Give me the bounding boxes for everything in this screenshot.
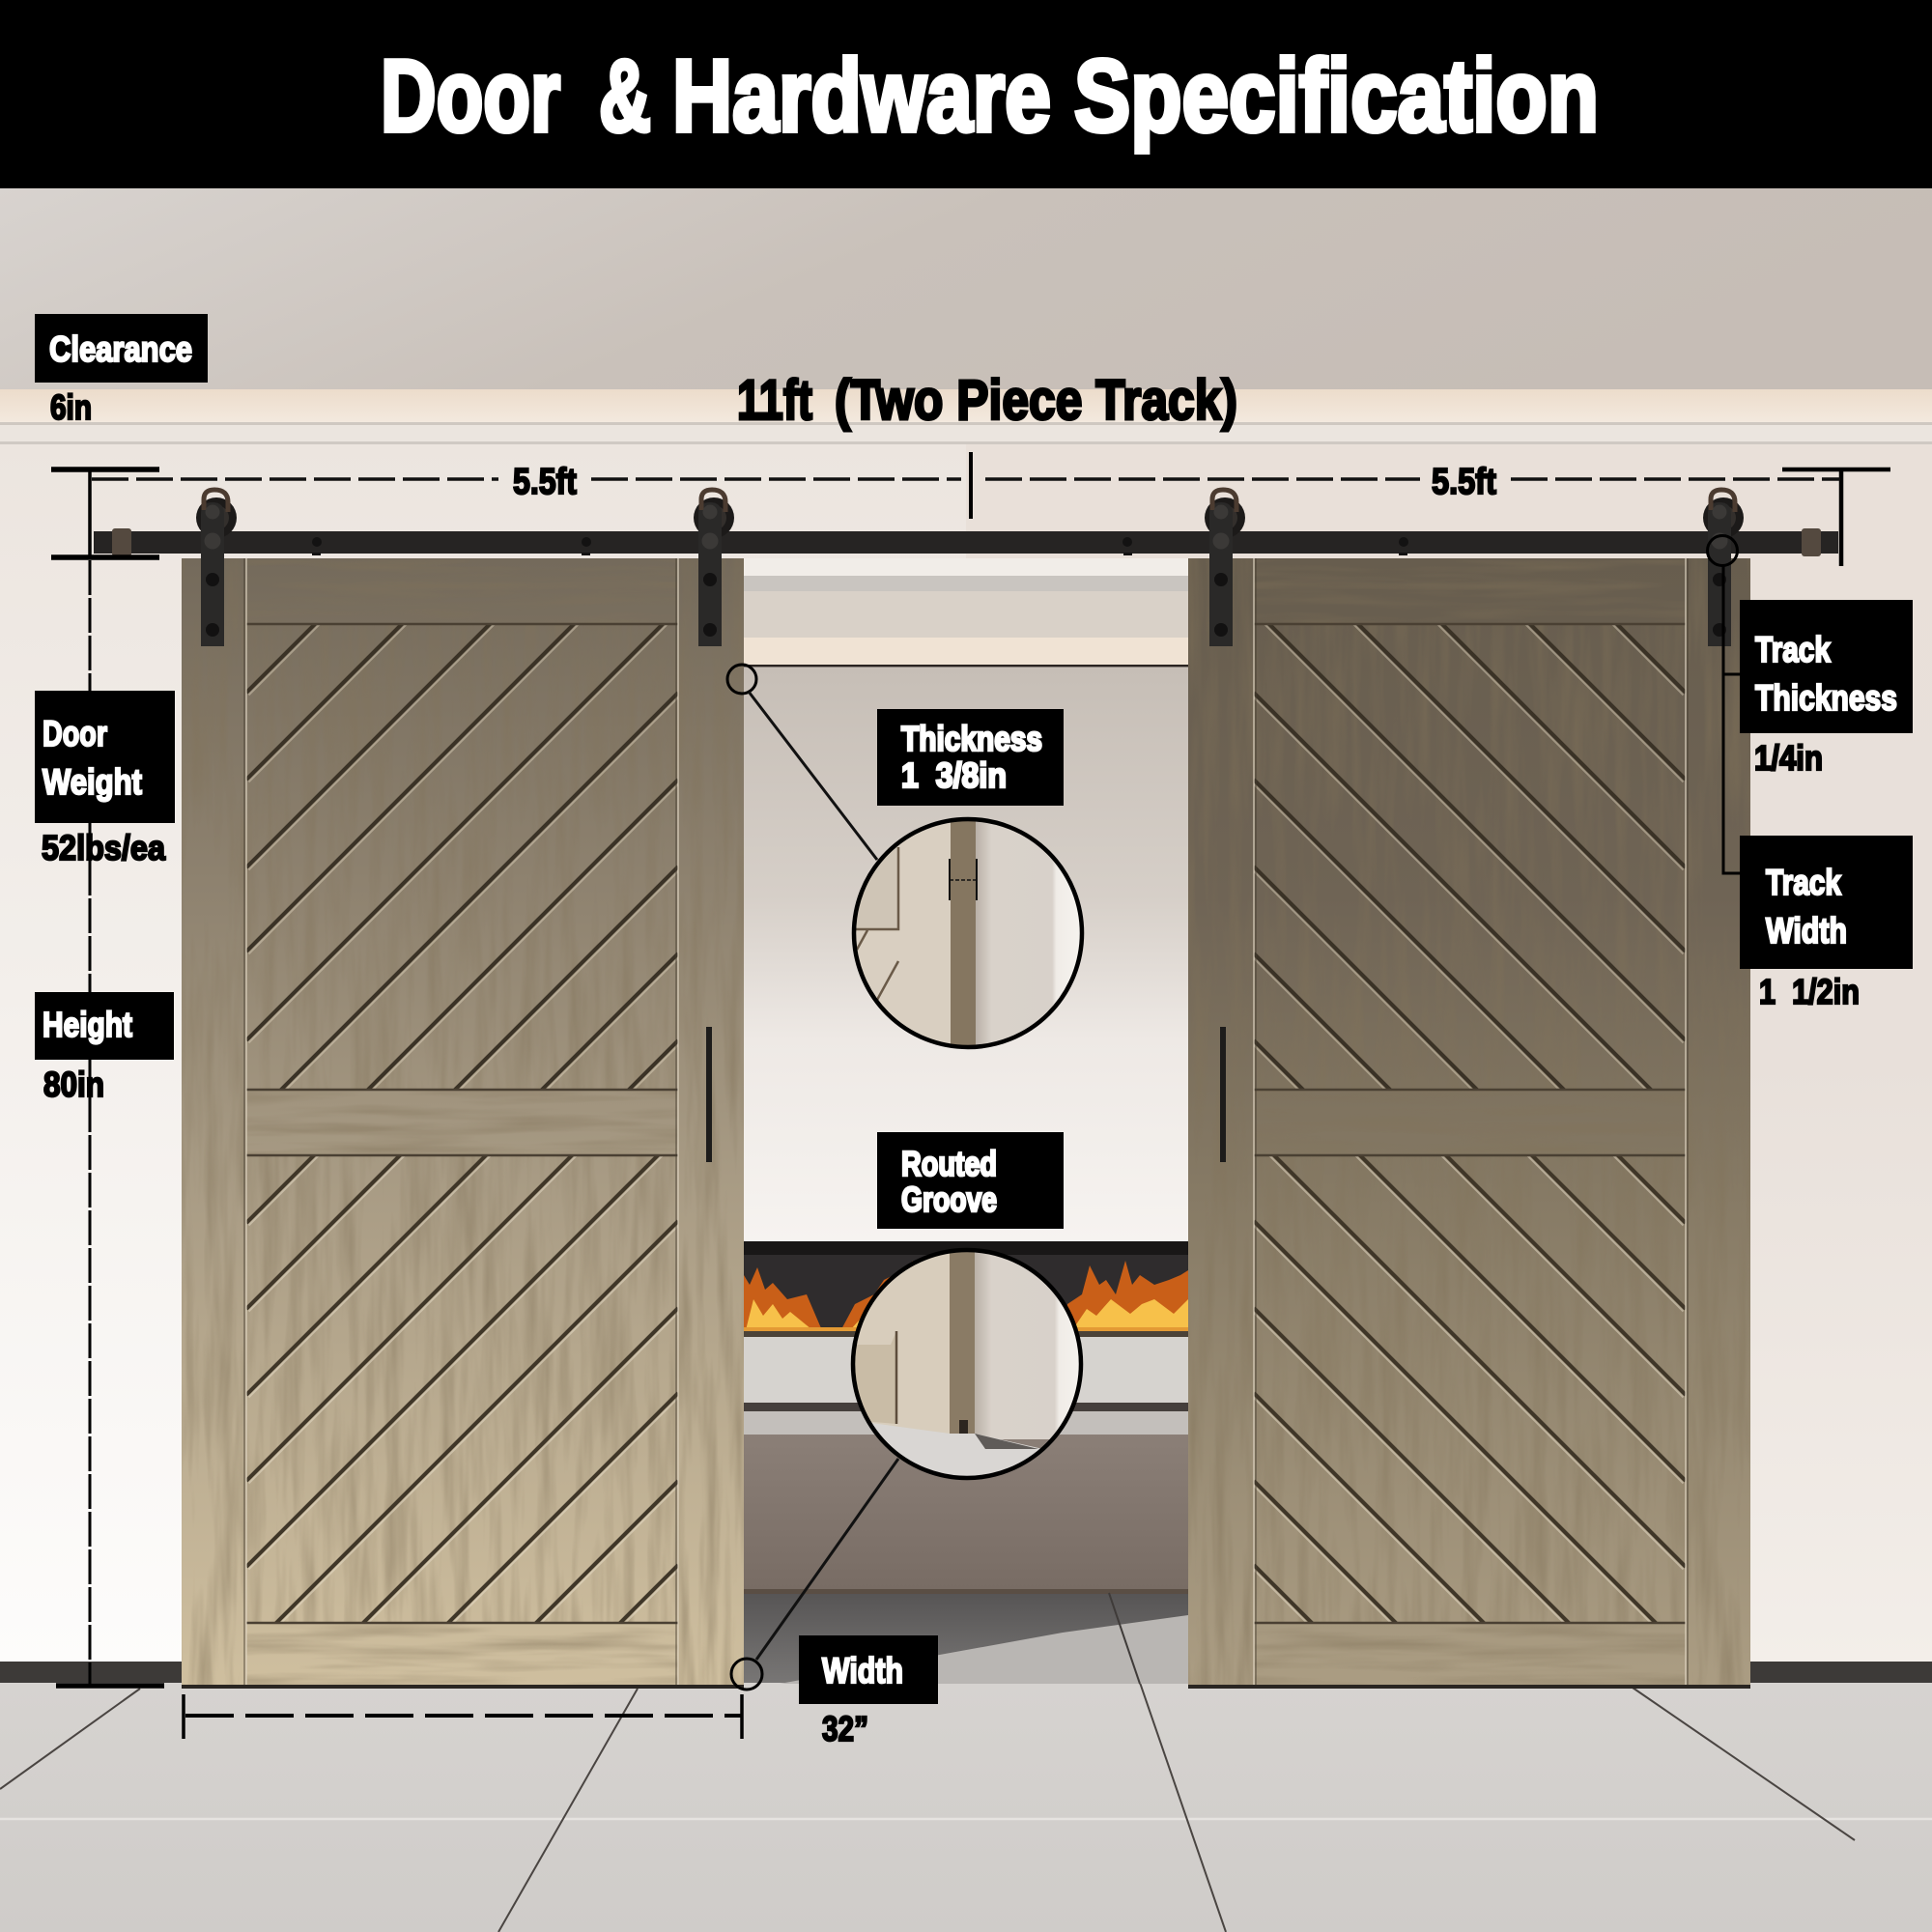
height dimension line bbox=[56, 469, 164, 1686]
rug bbox=[744, 1435, 1188, 1591]
width label: Width bbox=[822, 1651, 903, 1690]
magnified door bottom bbox=[850, 1246, 1086, 1483]
left wall bbox=[0, 444, 966, 1663]
track and hangers bbox=[94, 490, 1838, 646]
routed groove label bbox=[877, 1132, 1064, 1229]
track thickness label: Track bbox=[1755, 630, 1831, 669]
track stoppers bbox=[112, 528, 131, 556]
source marker bbox=[727, 665, 756, 694]
track width label: Width bbox=[1766, 911, 1847, 951]
baseboard bbox=[0, 1662, 1932, 1684]
hanger 1 bbox=[196, 490, 237, 646]
dashed spans bbox=[92, 477, 1840, 481]
track length heading: 11ft bbox=[737, 369, 812, 432]
opening between doors bbox=[744, 558, 1188, 1684]
thickness magnifier bbox=[727, 665, 1082, 1048]
header bar bbox=[0, 0, 1932, 188]
thickness label bbox=[877, 709, 1064, 806]
door weight label: Door bbox=[43, 714, 107, 753]
source marker bbox=[731, 1659, 762, 1690]
routed groove label: Groove bbox=[901, 1179, 997, 1219]
right barn door bbox=[1188, 261, 1750, 1932]
thickness label: Thickness bbox=[901, 719, 1042, 758]
fireplace band bbox=[744, 1241, 1188, 1330]
width label bbox=[799, 1635, 938, 1748]
left end bracket bbox=[51, 469, 159, 557]
crown molding bbox=[0, 422, 1932, 445]
track thickness label bbox=[1740, 600, 1913, 778]
center tick bbox=[969, 452, 973, 519]
door weight label bbox=[35, 691, 175, 867]
title: Hardware bbox=[672, 39, 1051, 153]
clearance value: 6in bbox=[50, 387, 92, 427]
ceiling area bbox=[0, 188, 1932, 391]
fireplace base bbox=[744, 1331, 1188, 1338]
right 5.5ft: 5.5ft bbox=[1432, 462, 1496, 502]
track thickness label: Thickness bbox=[1755, 678, 1897, 718]
title: & bbox=[599, 39, 651, 153]
track width label bbox=[1740, 836, 1913, 1011]
top dimension lines bbox=[51, 452, 1890, 566]
door weight value: 52lbs/ea bbox=[42, 828, 166, 867]
width value: 32” bbox=[822, 1709, 868, 1748]
thickness dimension mark bbox=[950, 859, 977, 900]
height label: Height bbox=[43, 1005, 132, 1044]
flames bbox=[744, 1261, 1188, 1331]
leader line bbox=[756, 1459, 898, 1660]
routed groove label: Routed bbox=[901, 1144, 997, 1183]
wall bolts bbox=[312, 537, 1408, 555]
title: Door bbox=[381, 39, 560, 153]
hanger 2 bbox=[694, 490, 734, 646]
floor tiles bbox=[0, 1683, 1932, 1932]
title bbox=[381, 39, 1599, 153]
track rail bbox=[94, 531, 1838, 554]
back wall bbox=[744, 666, 1188, 1241]
magnified door edge bbox=[850, 816, 1082, 1048]
left 5.5ft: 5.5ft bbox=[513, 462, 577, 502]
door slab bbox=[1188, 558, 1750, 1687]
routed groove magnifier bbox=[731, 1246, 1086, 1690]
ceiling cove light bbox=[0, 389, 1932, 422]
left barn door bbox=[182, 261, 744, 1932]
leader line bbox=[749, 692, 877, 860]
track callout connector bbox=[1708, 535, 1740, 873]
door panels, grooves and handle bbox=[182, 261, 744, 1932]
hanger 3 bbox=[1205, 490, 1245, 646]
right end bracket bbox=[1782, 469, 1890, 566]
clearance label bbox=[35, 314, 208, 427]
right wall bbox=[966, 444, 1932, 1663]
upper beam bbox=[744, 558, 1188, 589]
track length heading: (Two Piece Track) bbox=[835, 369, 1237, 432]
height value: 80in bbox=[43, 1065, 104, 1104]
door panels, grooves and handle bbox=[1188, 261, 1750, 1932]
clearance label: Clearance bbox=[49, 329, 192, 369]
thickness label: 1 3/8in bbox=[901, 755, 1007, 795]
track width value: 1 1/2in bbox=[1759, 972, 1860, 1011]
height label bbox=[35, 992, 174, 1104]
door slab bbox=[182, 558, 744, 1687]
door weight label: Weight bbox=[43, 762, 142, 802]
track width label: Track bbox=[1766, 863, 1841, 902]
floor in shadow bbox=[744, 1594, 1188, 1683]
width dimension line bbox=[184, 1694, 742, 1739]
track thickness value: 1/4in bbox=[1754, 738, 1823, 778]
title: Specification bbox=[1074, 39, 1599, 153]
hanger 4 bbox=[1703, 490, 1744, 646]
